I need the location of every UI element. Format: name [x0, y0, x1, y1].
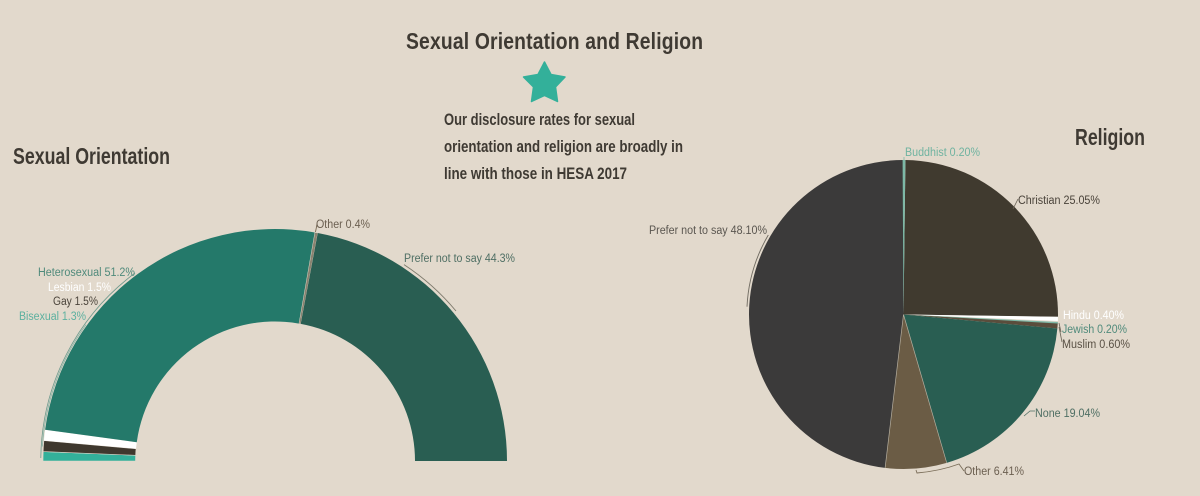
- labels: religion: Other 6.41%: [964, 466, 1024, 478]
- slice: hindu: [904, 314, 1058, 321]
- labels: religion: Muslim 0.60%: [1062, 339, 1130, 351]
- labels: religion: Buddhist 0.20%: [905, 147, 980, 159]
- slice: heterosexual: [45, 229, 315, 442]
- heading: religion: Religion: [1075, 124, 1145, 150]
- slice: none: [904, 314, 1057, 463]
- slice: muslim: [904, 314, 1058, 329]
- chart: religion pie: [747, 157, 1062, 473]
- slice: prefer not to say: [749, 160, 904, 468]
- labels: religion: None 19.04%: [1035, 408, 1100, 420]
- labels: sexual orientation: Gay 1.5%: [53, 296, 98, 308]
- labels: religion: Jewish 0.20%: [1062, 324, 1127, 336]
- labels: sexual orientation: Lesbian 1.5%: [48, 282, 111, 294]
- slice: other: [885, 314, 947, 469]
- slice: lesbian: [44, 430, 137, 449]
- heading: sexual orientation: Sexual Orientation: [13, 143, 170, 169]
- slice: bisexual: [43, 452, 136, 461]
- labels: religion: [649, 147, 1130, 478]
- text block: disclosure note: [444, 110, 683, 183]
- labels: sexual orientation: Prefer not to say 44.3%: [404, 253, 515, 265]
- leader lines: [747, 235, 768, 307]
- slice borders: [885, 314, 947, 468]
- labels: religion: Hindu 0.40%: [1063, 310, 1124, 322]
- slice: buddhist: [903, 160, 905, 314]
- labels: sexual orientation: Heterosexual 51.2%: [38, 267, 135, 279]
- icon: star: [524, 62, 565, 102]
- text block: disclosure note: line with those in HESA 2017: [444, 164, 627, 183]
- text block: disclosure note: orientation and religion are broadly in: [444, 137, 683, 156]
- title: Sexual Orientation and Religion: [406, 30, 703, 54]
- labels: religion: Prefer not to say 48.10%: [649, 225, 767, 237]
- slice: gay: [43, 441, 136, 455]
- labels: sexual orientation: [19, 219, 515, 323]
- labels: sexual orientation: Bisexual 1.3%: [19, 311, 86, 323]
- chart: sexual orientation half donut: [41, 224, 507, 461]
- text block: disclosure note: Our disclosure rates for sexual: [444, 110, 635, 129]
- slice: other: [299, 232, 318, 324]
- labels: religion: Christian 25.05%: [1018, 195, 1100, 207]
- slice: jewish: [904, 314, 1058, 324]
- slice: christian: [904, 160, 1058, 317]
- slice: prefer not to say: [301, 233, 507, 461]
- labels: sexual orientation: Other 0.4%: [316, 219, 370, 231]
- leader lines: [41, 273, 135, 458]
